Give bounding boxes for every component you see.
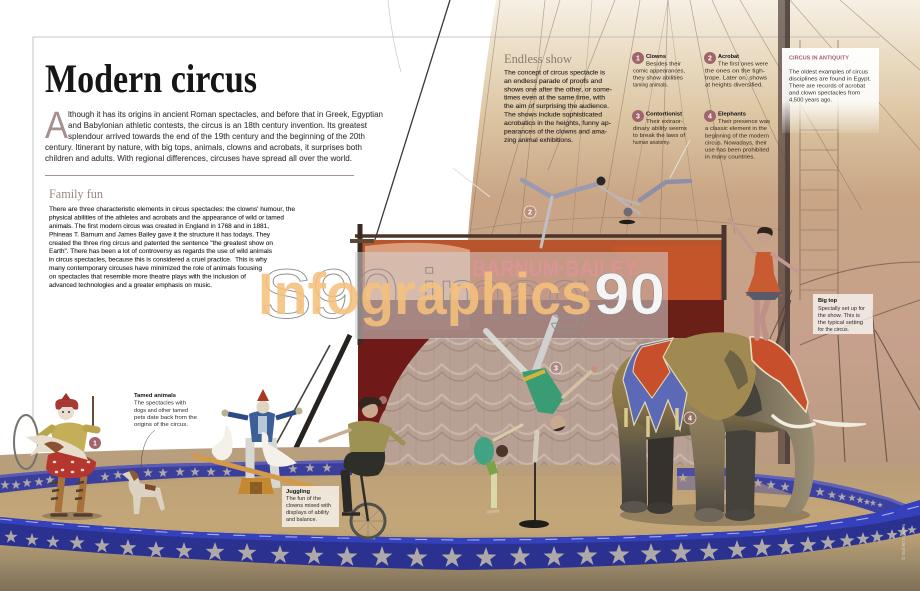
curtain: [358, 338, 720, 465]
heading: endless show: Endless show: [504, 51, 573, 66]
text: endless show: The shows include sophisticated: [504, 112, 602, 118]
big top tent canvas: [466, 0, 920, 470]
note 3: contortionist: human anatomy.: [633, 140, 670, 146]
callout: circus in antiquity: CIRCUS IN ANTIQUITY: [789, 56, 849, 62]
juggling caption: Juggling: [286, 489, 310, 495]
big top caption: the typical setting: [818, 320, 863, 326]
big top caption: for the circus.: [818, 327, 849, 333]
intro paragraph: century. Itinerant by nature, with big tops, animals, clowns and acrobats, it surprises both: [45, 143, 362, 152]
text: family fun: animals. The first modern circus was created in England in 1768 and in 1881,: [49, 224, 269, 230]
watermark: [258, 252, 668, 339]
text: family fun: Earth". There has been a lot of controversy as regards the use of wild animals: [49, 249, 272, 255]
note 4: elephants: circus. Nowadays, their: [705, 140, 767, 146]
clown with geese on seesaw: [195, 389, 320, 494]
juggling caption: clowns mixed with: [286, 503, 331, 509]
text: family fun: in circus spectacles, because this is considered a cruel practice. This is why: [49, 258, 267, 264]
marker 1: [89, 437, 101, 449]
juggling caption: and balance.: [286, 517, 317, 523]
tusks: [773, 416, 814, 427]
note 1: clowns: Besides their: [646, 62, 681, 68]
marker 2: [524, 206, 536, 218]
back ring, right: [677, 468, 920, 516]
note 4: elephants: 4: [708, 114, 712, 120]
big top caption: [813, 294, 873, 334]
elephant: [612, 332, 866, 526]
credit: © Sol 90 Images: [900, 523, 906, 560]
note 2: acrobat: 2: [708, 56, 712, 62]
watermark: Infographics: [258, 262, 592, 327]
floor: [0, 447, 920, 591]
callout: circus in antiquity: 4,500 years ago.: [789, 98, 832, 104]
tamed animals caption: [134, 393, 197, 470]
note 4: elephants: in many countries.: [705, 154, 755, 160]
intro paragraph: splendour arrived towards the end of the 19th century and the beginning of the 20th: [68, 132, 365, 141]
note 1: clowns: [632, 52, 686, 88]
note 3: contortionist: [632, 110, 687, 146]
head drape: [750, 337, 808, 412]
dog: [122, 471, 165, 514]
clown with hoop and dog: [14, 393, 102, 520]
note 2: acrobat: at heights diversified.: [705, 82, 763, 88]
sand ring interior shading: [0, 476, 880, 535]
note 4: elephants: a classic element in the: [705, 126, 767, 132]
trapeze artists: [453, 140, 690, 247]
marker 4: 4: [688, 416, 692, 422]
callout: circus in antiquity: disciplines are found in Egypt.: [789, 76, 871, 82]
callout: circus in antiquity: [782, 48, 879, 133]
tamed animals caption: dogs and other tamed: [134, 408, 188, 414]
text: endless show: the aim of surprising the audience.: [504, 104, 609, 110]
text: family fun: created the three ring circus and patented the sentence "the greatest show on: [49, 241, 273, 247]
juggling caption: displays of ability: [286, 510, 329, 516]
marker 4: [684, 412, 696, 424]
text: endless show: an endless parade of proofs and: [504, 79, 602, 85]
intro paragraph: and Babylonian athletic contests, the circus is an 18th century invention. Its greatest: [68, 121, 368, 130]
intro paragraph: [45, 105, 383, 163]
intro paragraph: children and adults. With regional differences, circuses have spread all over the world.: [45, 154, 352, 163]
note 1: clowns: 1: [636, 56, 640, 62]
note 4: elephants: Their presence was: [718, 119, 770, 125]
watermark: 90: [594, 262, 665, 327]
front ring: [0, 500, 920, 570]
text: family fun: [49, 207, 296, 289]
juggling caption: The fun of the: [286, 496, 321, 502]
text: endless show: pearances of the clowns and ama-: [504, 130, 607, 136]
text: endless show: The concept of circus spectacle is: [504, 70, 605, 76]
note 4: elephants: Elephants: [718, 112, 746, 118]
title: Modern circus: [45, 56, 257, 101]
note 4: elephants: beginning of the modern: [705, 134, 769, 140]
watermark: S90 imag: [260, 255, 590, 333]
ropes and tent pole: [274, 0, 838, 470]
tamed animals caption: Tamed animals: [134, 393, 176, 399]
drop cap: A: [45, 105, 69, 147]
frame line: [33, 37, 880, 423]
back ring, left: [0, 460, 352, 493]
hand-balancing acrobat on pole: [486, 318, 597, 528]
marker 2: 2: [528, 210, 532, 216]
note 2: acrobat: the ones on the tigh-: [705, 68, 765, 74]
stage backdrop: [350, 224, 724, 465]
note 4: elephants: use has been prohibited: [705, 148, 769, 154]
marker 3: [550, 362, 562, 374]
callout: circus in antiquity: There are records of acrobat: [789, 84, 866, 90]
note 1: clowns: taming animals.: [633, 82, 668, 88]
note 2: acrobat: [704, 52, 768, 88]
callout: circus in antiquity: The oldest examples of circus: [789, 70, 868, 76]
text: family fun: advanced technologies and a greater emphasis on music.: [49, 283, 212, 289]
big top caption: Big top: [818, 298, 838, 304]
contortionist acrobat: [474, 425, 522, 512]
note 1: clowns: comic appearances,: [633, 68, 686, 74]
big top caption: the show. This is: [818, 313, 860, 319]
text: endless show: zing animal exhibitions.: [504, 138, 573, 144]
text: family fun: physical abilities of the athletes and acrobats and the appearance of wild or tamed: [49, 216, 284, 222]
text: family fun: on spectacles that resemble more theatre plays with the inclusion of: [49, 274, 246, 280]
note 2: acrobat: trope. Later on, shows: [705, 76, 767, 82]
marker 1: 1: [93, 440, 97, 448]
woman balancing on elephant: [729, 219, 798, 338]
note 3: contortionist: to break the laws of: [633, 133, 686, 139]
big top caption: Specially set up for: [818, 306, 865, 312]
text: family fun: many contemporary circuses have minimized the role of animals focusing: [49, 266, 262, 272]
text: family fun: There are three characteristic elements in circus spectacles: the clowns' humour, the: [49, 207, 296, 213]
tamed animals caption: origins of the circus.: [134, 422, 188, 428]
tamed animals caption: The spectacles with: [134, 400, 186, 406]
text: endless show: times even at the same time, with: [504, 96, 605, 102]
heading: family fun: Family fun: [49, 186, 103, 201]
note 3: contortionist: Contortionist: [646, 112, 682, 118]
text: endless show: [504, 70, 612, 144]
tamed animals caption: pets date back from the: [134, 415, 197, 421]
note 4: elephants: [704, 110, 770, 160]
marker 3: 3: [554, 366, 558, 372]
text: family fun: Phineas T. Barnum and James Bailey gave it the structure it has todays. They: [49, 232, 270, 238]
juggling caption: [282, 486, 339, 527]
unicyclist: [320, 397, 403, 538]
note 2: acrobat: Acrobat: [718, 54, 739, 60]
divider: [45, 174, 354, 176]
text: endless show: shows one after the other, or some-: [504, 88, 612, 94]
note 1: clowns: Clowns: [646, 54, 666, 60]
note 3: contortionist: Their extraor-: [646, 119, 683, 125]
callout: circus in antiquity: and clown spectacles from: [789, 90, 861, 96]
text: endless show: acrobatics in the heights, funny ap-: [504, 121, 611, 127]
saddle cloth: [623, 338, 687, 432]
poster lettering: BARNUM·BAILEY: [472, 256, 637, 281]
note 3: contortionist: dinary ability seems: [633, 126, 687, 132]
note 3: contortionist: 3: [636, 114, 640, 120]
note 1: clowns: they show abilities: [633, 76, 683, 82]
note 2: acrobat: The first ones were: [718, 62, 768, 68]
intro paragraph: lthough it has its origins in ancient Roman spectacles, and before that in Greek, Egyptian: [68, 110, 383, 119]
